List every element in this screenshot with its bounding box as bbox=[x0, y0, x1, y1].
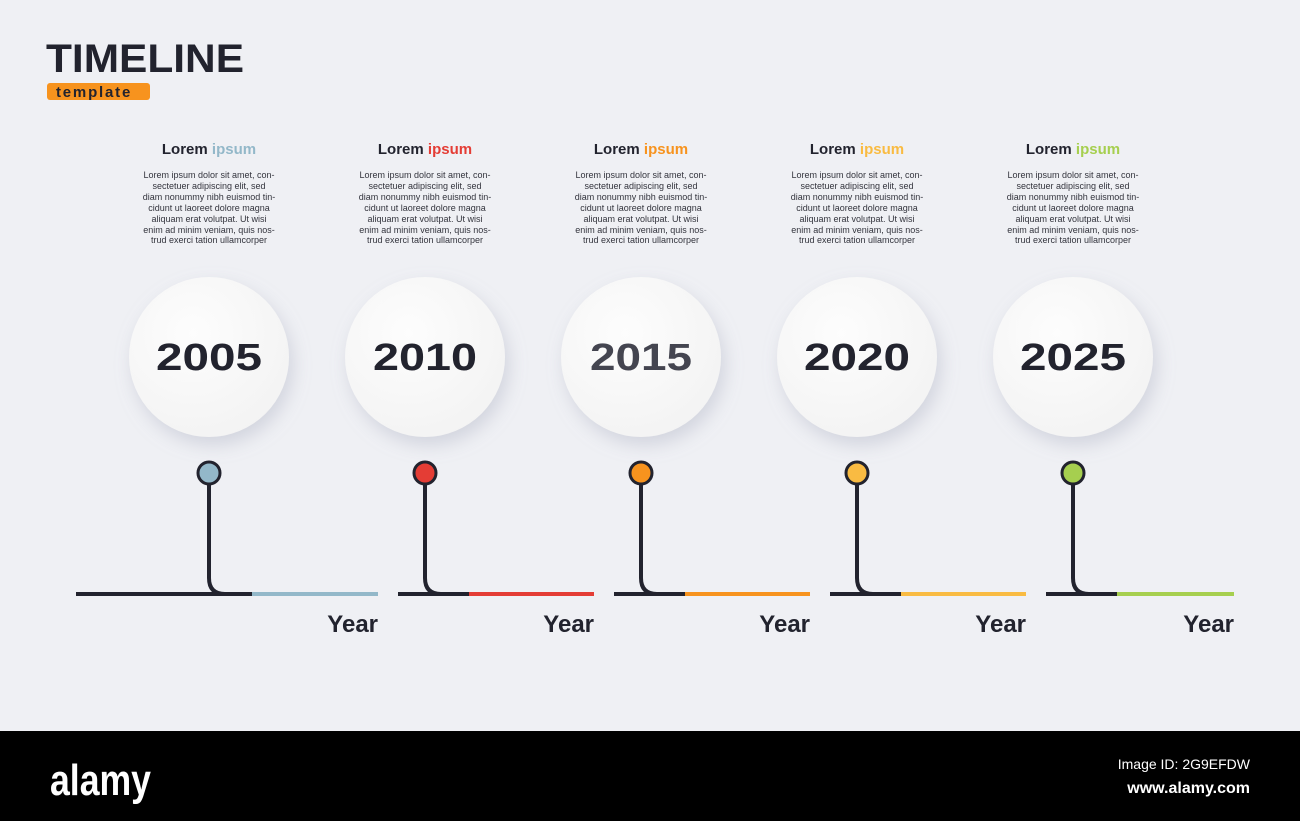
body text: diam nonummy nibh euismod tin- bbox=[143, 192, 275, 202]
step 1: 2005 bbox=[76, 141, 378, 638]
footer band: www.alamy.com bbox=[1126, 780, 1250, 797]
step 3: 2015: aliquam erat volutpat. Ut wisi bbox=[583, 214, 699, 224]
footer band: alamy bbox=[50, 756, 151, 805]
step 2: 2010 bbox=[345, 141, 594, 638]
step 5: 2025: Lorem ipsum bbox=[1026, 141, 1120, 158]
step 3: 2015: 2015 bbox=[590, 337, 692, 379]
step 2: 2010: cidunt ut laoreet dolore magna bbox=[364, 203, 486, 213]
body text: Lorem ipsum dolor sit amet, con- bbox=[143, 170, 275, 180]
year circle bbox=[129, 277, 289, 437]
step 4: 2020: diam nonummy nibh euismod tin- bbox=[791, 192, 923, 202]
step 4: 2020: 2020 bbox=[804, 337, 910, 379]
step 4: 2020: enim ad minim veniam, quis nos- bbox=[791, 225, 923, 235]
step 2: 2010: Lorem ipsum bbox=[378, 141, 472, 158]
step 5: 2025 bbox=[993, 141, 1234, 638]
step 5: 2025: trud exerci tation ullamcorper bbox=[1015, 235, 1131, 245]
step 3: 2015: Lorem ipsum dolor sit amet, con- bbox=[575, 170, 707, 180]
title: template bbox=[56, 84, 132, 101]
step 5: 2025: Lorem ipsum dolor sit amet, con- bbox=[1007, 170, 1139, 180]
step 5: 2025: sectetuer adipiscing elit, sed bbox=[1016, 181, 1130, 191]
step 5: 2025: aliquam erat volutpat. Ut wisi bbox=[1015, 214, 1131, 224]
step 3: 2015: Lorem ipsum bbox=[594, 141, 688, 158]
step 4: 2020: cidunt ut laoreet dolore magna bbox=[796, 203, 918, 213]
step 2: 2010: aliquam erat volutpat. Ut wisi bbox=[367, 214, 483, 224]
step 1: 2005: 2005 bbox=[156, 337, 262, 379]
step 5: 2025: enim ad minim veniam, quis nos- bbox=[1007, 225, 1139, 235]
step 4: 2020: trud exerci tation ullamcorper bbox=[799, 235, 915, 245]
step 2: 2010: Year bbox=[543, 611, 594, 638]
body text bbox=[143, 170, 275, 245]
step 5: 2025: cidunt ut laoreet dolore magna bbox=[1012, 203, 1134, 213]
step 3: 2015: sectetuer adipiscing elit, sed bbox=[584, 181, 698, 191]
step 4: 2020: aliquam erat volutpat. Ut wisi bbox=[799, 214, 915, 224]
step 3: 2015: Year bbox=[759, 611, 810, 638]
step 3: 2015: trud exerci tation ullamcorper bbox=[583, 235, 699, 245]
step 3: 2015 bbox=[561, 141, 810, 638]
title: TIMELINE bbox=[46, 37, 244, 81]
step 5: 2025: Year bbox=[1183, 611, 1234, 638]
heading: Lorem ipsum bbox=[162, 141, 256, 158]
step 2: 2010: 2010 bbox=[373, 337, 477, 379]
step 2: 2010: trud exerci tation ullamcorper bbox=[367, 235, 483, 245]
step 4: 2020: Year bbox=[975, 611, 1026, 638]
step 5: 2025: 2025 bbox=[1020, 337, 1126, 379]
body text: aliquam erat volutpat. Ut wisi bbox=[151, 214, 267, 224]
step 2: 2010: Lorem ipsum dolor sit amet, con- bbox=[359, 170, 491, 180]
footer band: Image ID: 2G9EFDW bbox=[1118, 756, 1251, 772]
step 3: 2015: cidunt ut laoreet dolore magna bbox=[580, 203, 702, 213]
pin and line bbox=[209, 484, 225, 594]
step 1: 2005: Year bbox=[327, 611, 378, 638]
body text: enim ad minim veniam, quis nos- bbox=[143, 225, 275, 235]
body text: trud exerci tation ullamcorper bbox=[151, 235, 267, 245]
title bbox=[46, 37, 244, 101]
step 2: 2010: diam nonummy nibh euismod tin- bbox=[359, 192, 491, 202]
step 2: 2010: enim ad minim veniam, quis nos- bbox=[359, 225, 491, 235]
step 4: 2020: Lorem ipsum dolor sit amet, con- bbox=[791, 170, 923, 180]
step 4: 2020: Lorem ipsum bbox=[810, 141, 904, 158]
footer band bbox=[0, 731, 1300, 821]
body text: cidunt ut laoreet dolore magna bbox=[148, 203, 270, 213]
step 4: 2020 bbox=[777, 141, 1026, 638]
step 5: 2025: diam nonummy nibh euismod tin- bbox=[1007, 192, 1139, 202]
step 4: 2020: sectetuer adipiscing elit, sed bbox=[800, 181, 914, 191]
body text: sectetuer adipiscing elit, sed bbox=[152, 181, 266, 191]
step 3: 2015: diam nonummy nibh euismod tin- bbox=[575, 192, 707, 202]
step 2: 2010: sectetuer adipiscing elit, sed bbox=[368, 181, 482, 191]
step 3: 2015: enim ad minim veniam, quis nos- bbox=[575, 225, 707, 235]
